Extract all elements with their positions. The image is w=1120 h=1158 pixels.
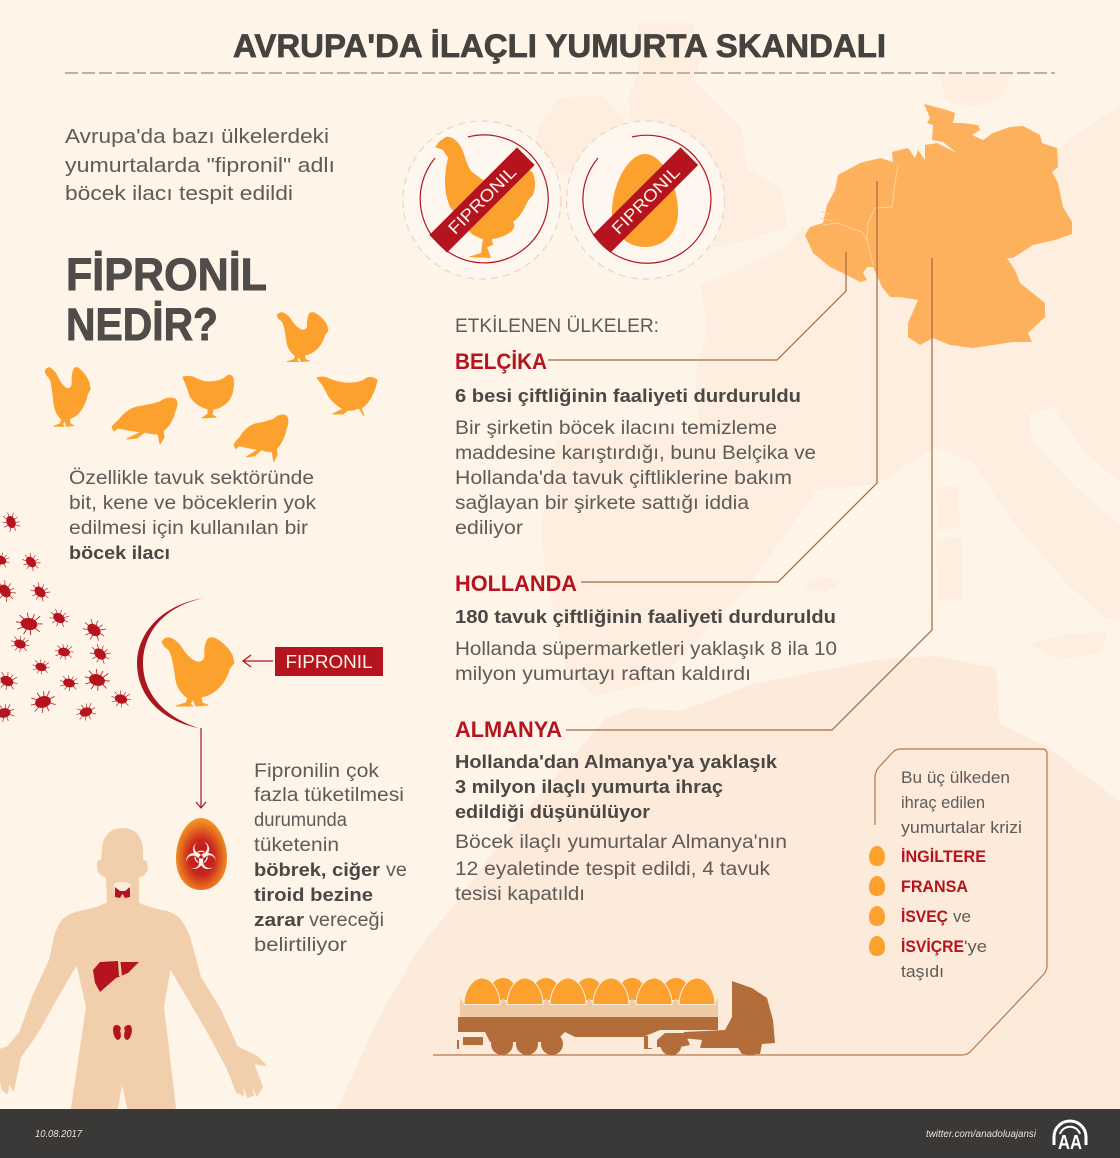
- heading: fipronil nedir: NEDİR?: [66, 299, 218, 350]
- intro text: böcek ilacı tespit edildi: [65, 182, 293, 205]
- intro text: [65, 125, 335, 205]
- panel: export countries: ihraç edilen: [901, 794, 985, 812]
- text: health effects: tiroid bezine: [254, 884, 373, 905]
- label: fipronil: FIPRONIL: [286, 652, 372, 672]
- intro text: Avrupa'da bazı ülkelerdeki: [65, 125, 329, 148]
- section: Germany: edildiği düşünülüyor: [455, 801, 650, 822]
- section: Germany: 12 eyaletinde tespit edildi, 4 tavuk: [455, 859, 771, 880]
- footer bar: 10.08.2017: [35, 1128, 83, 1140]
- text: health effects: ve: [386, 860, 407, 881]
- section: Germany: [455, 717, 787, 905]
- intro text: yumurtalarda "fipronil" adlı: [65, 154, 335, 177]
- panel: export countries: yumurtalar krizi: [901, 819, 1022, 837]
- title: AVRUPA'DA İLAÇLI YUMURTA SKANDALI: [233, 28, 886, 64]
- section: Germany: ALMANYA: [455, 717, 562, 742]
- panel: export countries: FRANSA: [901, 878, 968, 896]
- route frame line: [433, 749, 1047, 1055]
- section: Belgium: BELÇİKA: [455, 349, 547, 374]
- section: Belgium: Hollanda'da tavuk çiftliklerine bakım: [455, 468, 792, 489]
- text: health effects: Fipronilin çok: [254, 761, 380, 782]
- section: Belgium: sağlayan bir şirkete sattığı iddia: [455, 493, 749, 514]
- section: Netherlands: HOLLANDA: [455, 571, 577, 596]
- panel: export countries: taşıdı: [901, 963, 944, 981]
- panel: export countries: İNGİLTERE: [901, 848, 986, 866]
- text: health effects: durumunda: [254, 810, 347, 831]
- heading: fipronil nedir: [66, 249, 267, 350]
- footer bar: [0, 1109, 1120, 1158]
- logo: AA: [1054, 1121, 1086, 1154]
- text: what fipronil is used for: bit, kene ve böceklerin yok: [69, 493, 317, 514]
- label: fipronil: [275, 647, 383, 676]
- organ: liver: [93, 961, 139, 992]
- text: health effects: [254, 761, 407, 956]
- section: Netherlands: milyon yumurtayı raftan kaldırdı: [455, 664, 751, 685]
- icon: banned egg: FIPRONIL: [608, 163, 684, 238]
- icon: flock of chickens: [45, 313, 377, 462]
- section: Netherlands: Hollanda süpermarketleri yaklaşık 8 ila 10: [455, 639, 837, 660]
- panel: export countries: İSVEÇ: [901, 908, 948, 926]
- panel: export countries: Bu üç ülkeden: [901, 769, 1010, 787]
- panel: export countries: [869, 769, 1022, 981]
- text: health effects: vereceği: [309, 910, 384, 931]
- logo: AA: AA: [1058, 1132, 1082, 1154]
- footer bar: twitter.com/anadoluajansi: [926, 1128, 1037, 1140]
- background map: [340, 25, 1120, 1108]
- heading: fipronil nedir: FİPRONİL: [66, 249, 267, 300]
- icon: protective crescent: [137, 598, 204, 728]
- text: what fipronil is used for: böcek ilacı: [69, 542, 170, 563]
- illustration: egg truck: [457, 978, 775, 1056]
- arrow: fipronil to chicken: [243, 655, 273, 667]
- section: Belgium: ediliyor: [455, 518, 524, 539]
- section: Germany: tesisi kapatıldı: [455, 884, 585, 905]
- truck body: [457, 981, 775, 1056]
- organ: kidneys: [113, 1025, 132, 1040]
- panel: export countries: İSVİÇRE: [901, 938, 964, 956]
- panel: export countries: ve: [953, 908, 971, 926]
- text: what fipronil is used for: edilmesi için kullanılan bir: [69, 518, 309, 539]
- leader lines: [548, 181, 932, 730]
- icon: contaminated egg: ☣: [184, 835, 218, 878]
- icon: banned chicken: [403, 121, 561, 279]
- text: health effects: böbrek, ciğer: [254, 859, 380, 880]
- section: Belgium: 6 besi çiftliğinin faaliyeti durduruldu: [455, 385, 801, 406]
- small eggs: [488, 978, 691, 1000]
- panel: export countries: 'ye: [964, 938, 987, 956]
- icon: chicken: [162, 638, 234, 706]
- trailer bed: [460, 998, 718, 1017]
- organ: thyroid: [114, 882, 131, 898]
- text: health effects: belirtiliyor: [254, 935, 348, 956]
- section: Netherlands: 180 tavuk çiftliğinin faaliyeti durduruldu: [455, 606, 836, 627]
- icon: mites: [0, 510, 133, 723]
- icon: egg bullets: [869, 846, 885, 956]
- text: what fipronil is used for: [69, 468, 317, 563]
- arrow: chicken to egg: [196, 728, 206, 808]
- section: Germany: 3 milyon ilaçlı yumurta ihraç: [455, 776, 723, 797]
- map: Belgium, Netherlands, Germany: [805, 104, 1072, 348]
- section: Belgium: maddesine karıştırdığı, bunu Belçika ve: [455, 443, 816, 464]
- big eggs: [464, 978, 715, 1004]
- text: health effects: zarar: [254, 909, 304, 930]
- section: Belgium: Bir şirketin böcek ilacını temizleme: [455, 418, 777, 439]
- icon: banned chicken: FIPRONIL: [445, 163, 520, 238]
- section label: affected countries: ETKİLENEN ÜLKELER:: [455, 316, 659, 337]
- text: what fipronil is used for: Özellikle tavuk sektöründe: [69, 468, 314, 489]
- section: Germany: Böcek ilaçlı yumurtalar Almanya'nın: [455, 832, 787, 853]
- illustration: human body: [0, 829, 265, 1108]
- icon: banned egg: [566, 121, 724, 279]
- section: Belgium: [455, 349, 816, 539]
- icon: contaminated egg: [176, 818, 227, 890]
- text: health effects: fazla tüketilmesi: [254, 785, 404, 806]
- section: Germany: Hollanda'dan Almanya'ya yaklaşık: [455, 751, 778, 772]
- section: Netherlands: [455, 571, 837, 685]
- text: health effects: tüketenin: [254, 835, 339, 856]
